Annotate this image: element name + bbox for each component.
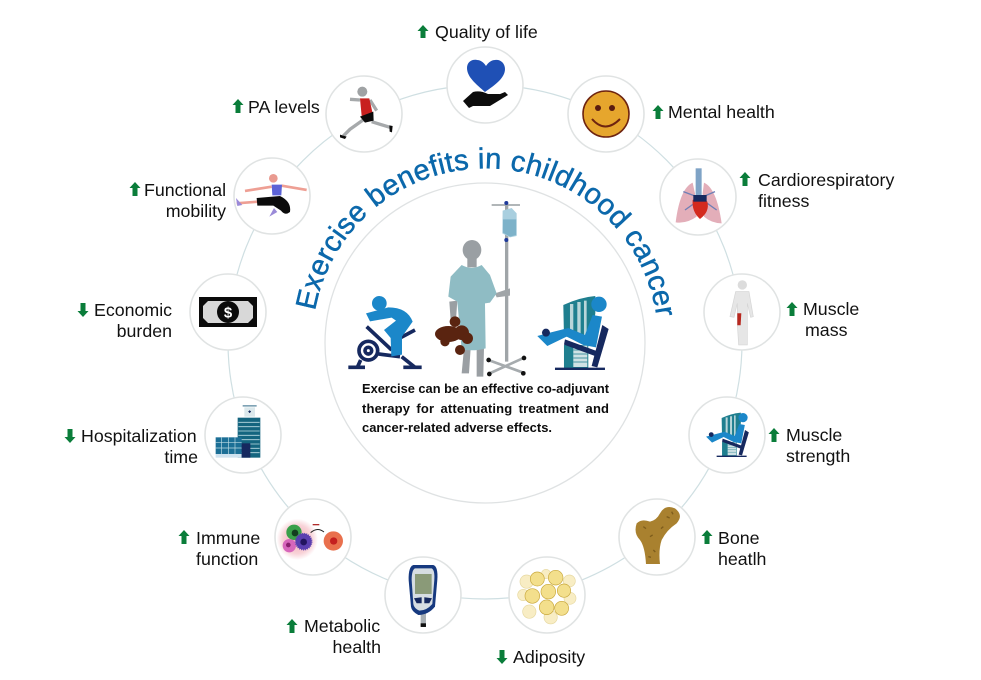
label: immune function: Immune (196, 528, 260, 548)
label: mental health: Mental health (668, 102, 775, 122)
label: hospitalization time (64, 426, 198, 467)
label: economic burden: burden (117, 321, 172, 341)
label: muscle strength: strength (786, 446, 850, 466)
icon: smiley face (583, 91, 629, 137)
node: cardiorespiratory fitness (660, 159, 736, 235)
label: adiposity: Adiposity (513, 647, 585, 667)
label: economic burden (78, 300, 172, 341)
icon: body with highlighted thigh (730, 280, 753, 345)
label: bone health: Bone (718, 528, 760, 548)
label: metabolic health: health (333, 637, 381, 657)
icon: patient with teddy bear and IV pole (435, 201, 526, 377)
label: cardiorespiratory fitness (740, 170, 894, 211)
label: immune function: function (196, 549, 258, 569)
text block: central message (362, 381, 610, 435)
icon: lungs and heart (676, 168, 722, 223)
text block: central message: Exercise can be an effective co-adjuvant (362, 381, 610, 396)
icon: leaping figure (236, 174, 307, 217)
label: hospitalization time: time (164, 447, 198, 467)
label: muscle mass: Muscle (803, 299, 859, 319)
label: muscle mass: mass (805, 320, 848, 340)
title: Exercise benefits in childhood cancer (296, 147, 672, 316)
icon: immune cells (277, 519, 343, 560)
node: adiposity (509, 557, 585, 633)
icon: leg press machine (537, 296, 609, 370)
label: muscle mass (786, 299, 859, 340)
text block: central message: therapy for attenuating treatment and (362, 401, 609, 416)
label: cardiorespiratory fitness: Cardiorespiratory (758, 170, 894, 190)
label: muscle strength: Muscle (786, 425, 842, 445)
label: metabolic health: Metabolic (304, 616, 380, 636)
icon: small leg press (706, 413, 749, 457)
label: quality of life: Quality of life (435, 22, 538, 42)
node: quality of life (447, 47, 523, 123)
label: economic burden: Economic (94, 300, 172, 320)
node: economic burden (190, 274, 266, 350)
label: functional mobility: Functional (144, 180, 226, 200)
icon: femur bone (636, 507, 680, 564)
node: hospitalization time (205, 397, 281, 473)
icon: fat cells (518, 569, 576, 624)
label: hospitalization time: Hospitalization (81, 426, 197, 446)
label: functional mobility (130, 180, 226, 221)
label: metabolic health (286, 616, 381, 657)
label: cardiorespiratory fitness: fitness (758, 191, 809, 211)
label: bone health (702, 528, 766, 569)
node: metabolic health (385, 557, 461, 633)
label: bone health: heatlh (718, 549, 766, 569)
node: muscle mass (704, 274, 780, 350)
icon: runner (340, 87, 393, 139)
node: muscle strength (689, 397, 765, 473)
icon: dollar bill: $ (224, 304, 233, 322)
icon: heart in hand (463, 60, 508, 108)
node: PA levels (326, 76, 402, 152)
label: PA levels: PA levels (248, 97, 320, 117)
ring connecting benefit nodes (228, 85, 742, 599)
panel: central circle (325, 183, 645, 503)
label: immune function (178, 528, 260, 569)
text block: central message: cancer-related adverse effects. (362, 420, 552, 435)
icon: glucose meter (409, 565, 437, 627)
label: muscle strength (768, 425, 850, 466)
node: functional mobility (234, 158, 310, 234)
icon: hospital building (216, 405, 260, 458)
label: functional mobility: mobility (166, 201, 226, 221)
icon: exercise bike (348, 296, 422, 367)
node: immune function (275, 499, 351, 575)
node: bone health (619, 499, 695, 575)
node: mental health (568, 76, 644, 152)
